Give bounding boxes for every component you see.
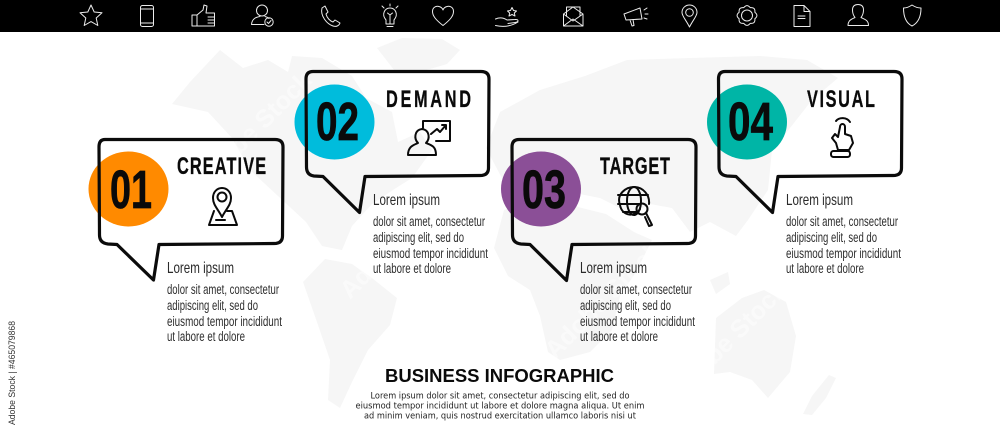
description text block: Lorem ipsum dolor sit amet, consectetur adipiscing elit, sed do [370,392,630,402]
icon: smartphone [140,6,154,26]
icon: globe with magnifier [618,187,652,226]
step 03 text: eiusmod tempor incididunt [580,314,695,329]
number 03: 03 [522,160,566,220]
stock credit vertical text: Adobe Stock | #465079868 [7,321,18,425]
step 04 text: eiusmod tempor incididunt [786,246,901,261]
panel: step 03 target [501,140,696,344]
heading target: TARGET [600,153,670,180]
description text block [356,392,644,422]
step 04 text: adipiscing elit, sed do [786,230,877,245]
stock watermark: Adobe Stock [189,66,317,194]
step 03 text [580,260,695,344]
number circle 01 [88,152,168,226]
step 03 text: adipiscing elit, sed do [580,298,671,313]
speech bubble outline 02 [306,72,489,212]
number 01: 01 [110,160,152,220]
icon: user check [252,5,273,26]
step 02 text: eiusmod tempor incididunt [373,246,488,261]
stock watermark: Adobe Stock [874,226,1000,354]
heading visual: VISUAL [807,86,875,113]
stock watermark: Adobe Stock [354,276,482,404]
number circle 03 [501,152,581,226]
speech bubble outline 03 [512,140,696,280]
icon: light bulb [382,4,398,26]
step 01 text: adipiscing elit, sed do [167,298,258,313]
step 01 text [167,260,282,344]
icon: location pin on map [209,188,237,225]
speech bubble outline 01 [99,140,283,280]
step 01 text: eiusmod tempor incididunt [167,314,282,329]
step 01 text: dolor sit amet, consectetur [167,282,279,297]
icon: presenter with chart [408,121,450,155]
step 04 text: ut labore et dolore [786,261,864,276]
icon: gear [737,6,757,25]
icon: document [794,6,810,26]
step 03 text: dolor sit amet, consectetur [580,282,692,297]
step 04 text: dolor sit amet, consectetur [786,214,898,229]
panel: step 02 demand [294,72,489,276]
step 04 text: Lorem ipsum [786,192,853,209]
heading demand: DEMAND [386,86,471,113]
icon: hand with star [496,8,518,26]
panel: step 04 visual [707,72,902,276]
number circle 04 [707,84,787,160]
title: BUSINESS INFOGRAPHIC [385,366,614,386]
number 02: 02 [316,92,359,152]
description text block: eiusmod tempor incididunt ut labore et dolore magna aliqua. Ut enim [356,402,644,412]
icon: megaphone [624,8,648,26]
icon: heart [432,6,454,25]
icon: star [80,5,102,26]
icon: thumbs up [192,5,214,26]
step 02 text: Lorem ipsum [373,192,440,209]
icon: open envelope [564,7,583,26]
background world map [172,38,838,415]
step 03 text: Lorem ipsum [580,260,647,277]
stock watermark [14,66,1000,404]
number circle 02 [294,84,374,160]
icon: shield [904,5,921,26]
speech bubble outline 04 [718,72,902,212]
step 01 text: ut labore et dolore [167,329,245,344]
step 04 text [786,192,901,276]
icon: tapping finger [831,118,853,157]
icon: telephone [322,6,340,26]
step 03 text: ut labore et dolore [580,329,658,344]
icon: person [848,4,868,26]
step 01 text: Lorem ipsum [167,260,234,277]
stock watermark: Adobe Stock [664,276,792,404]
step 02 text: adipiscing elit, sed do [373,230,464,245]
stock watermark: Adobe Stock [14,116,142,244]
step 02 text: dolor sit amet, consectetur [373,214,485,229]
panel: step 01 creative [88,140,283,344]
step 02 text: ut labore et dolore [373,261,451,276]
number 04: 04 [728,92,773,152]
stock watermark: Adobe Stock [334,176,462,304]
stock watermark: Adobe Stock [539,236,667,364]
step 02 text [373,192,488,276]
description text block: ad minim veniam, quis nostrud exercitation ullamco laboris nisi ut [364,412,636,422]
top icon bar [0,0,1000,32]
heading creative: CREATIVE [177,153,266,180]
icon: map pin [682,5,697,27]
